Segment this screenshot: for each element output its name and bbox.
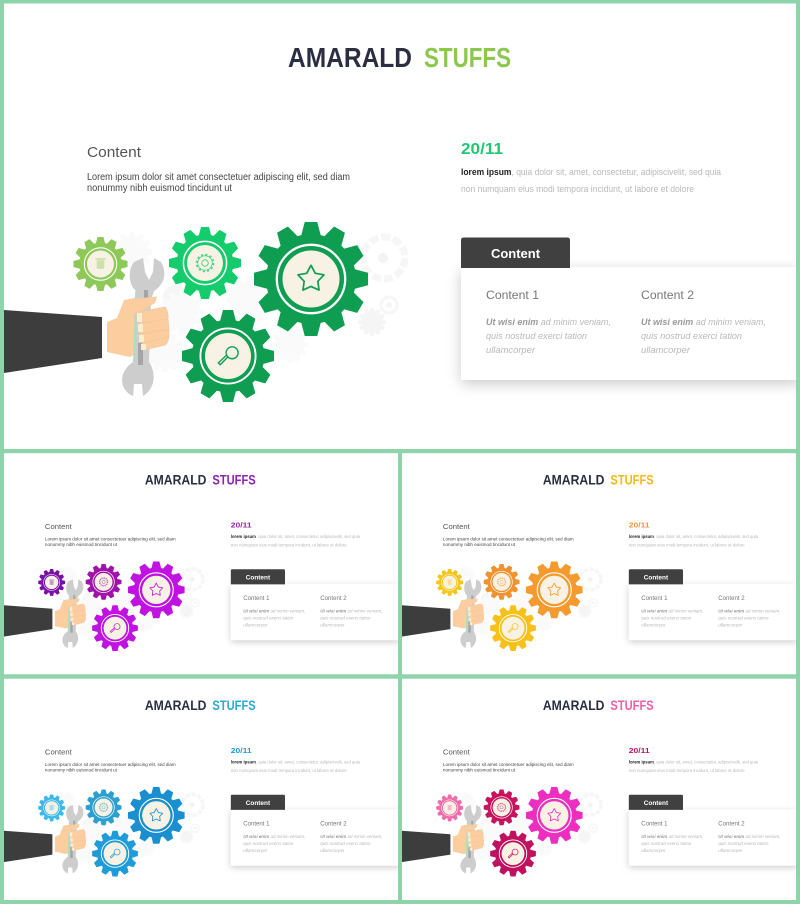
column 2 — [320, 821, 382, 854]
left text: Content — [45, 522, 73, 531]
tab: Content — [491, 246, 541, 261]
gear: magnifier icon — [490, 831, 536, 876]
card — [461, 267, 800, 380]
date: 20/11 — [461, 141, 503, 158]
gear: trash icon — [38, 569, 65, 596]
hand holding wrench — [4, 258, 169, 396]
background gears — [455, 792, 601, 862]
gear: cog icon — [484, 564, 519, 600]
title — [543, 472, 654, 487]
column 2 — [320, 596, 382, 629]
hand holding wrench — [402, 805, 484, 874]
title: AMARALD — [543, 698, 605, 713]
left paragraph: Lorem ipsum dolor sit amet consectetuer adipiscing elit, sed diam — [87, 172, 350, 183]
column 2: ullamcorper — [718, 848, 743, 854]
column 1: ullamcorper — [641, 623, 666, 629]
gear: magnifier icon — [92, 831, 138, 876]
right paragraph — [629, 760, 758, 774]
column 2: Ut wisi enim ad minim veniam, — [718, 834, 780, 840]
column 1: Ut wisi enim ad minim veniam, — [486, 317, 611, 328]
card — [629, 809, 798, 866]
left text: Lorem ipsum dolor sit amet consectetuer adipiscing elit, sed diam — [45, 537, 176, 543]
left text: nonummy nibh euismod tincidunt ut — [443, 542, 516, 548]
card — [231, 584, 400, 640]
title — [145, 698, 256, 713]
title: STUFFS — [610, 472, 654, 487]
background gears — [112, 232, 405, 372]
column 1: ullamcorper — [243, 623, 268, 629]
column 1: quis nostrud exerci tation — [641, 841, 692, 847]
column 1: Content 1 — [641, 596, 668, 602]
date: 20/11 — [231, 521, 252, 530]
gear: cog icon — [86, 790, 121, 825]
left text — [443, 748, 574, 774]
left text: nonummy nibh euismod tincidunt ut — [443, 768, 516, 774]
column 2: quis nostrud exerci tation — [641, 331, 742, 342]
column 2: quis nostrud exerci tation — [320, 841, 371, 847]
background gears — [455, 567, 601, 636]
tab: Content — [246, 574, 271, 581]
right paragraph: non numquam eius modi tempora incidunt, ut labore et dolore — [629, 543, 745, 549]
tab: Content — [246, 800, 271, 807]
column 1: Ut wisi enim ad minim veniam, — [243, 834, 305, 840]
left text: Content — [443, 748, 471, 757]
gear: star icon — [128, 562, 185, 618]
title: AMARALD — [288, 42, 412, 73]
column 2: Ut wisi enim ad minim veniam, — [718, 609, 780, 615]
left text: nonummy nibh euismod tincidunt ut — [45, 542, 118, 548]
gear: cog icon — [86, 564, 121, 600]
column 1 — [243, 821, 305, 854]
column 2: Content 2 — [718, 596, 745, 602]
right paragraph: lorem ipsum, quia dolor sit, amet, consectetur, adipiscivelit, sed quia — [231, 534, 360, 540]
column 1: ullamcorper — [243, 848, 268, 854]
gear: cog icon — [484, 790, 519, 825]
tab — [461, 238, 570, 268]
column 1: Ut wisi enim ad minim veniam, — [641, 609, 703, 615]
column 2: Content 2 — [718, 821, 745, 827]
date: 20/11 — [231, 746, 252, 755]
gear: trash icon — [436, 569, 463, 596]
column 2: ullamcorper — [641, 345, 691, 356]
right paragraph — [461, 167, 722, 195]
title — [543, 698, 654, 713]
column 2: quis nostrud exerci tation — [718, 616, 769, 622]
tab: Content — [644, 574, 669, 581]
column 2: ullamcorper — [718, 623, 743, 629]
right paragraph — [231, 534, 360, 549]
left heading: Content — [87, 144, 142, 161]
column 2: Ut wisi enim ad minim veniam, — [320, 609, 382, 615]
title: STUFFS — [424, 42, 511, 73]
left text: nonummy nibh euismod tincidunt ut — [45, 768, 118, 774]
column 2: ullamcorper — [320, 623, 345, 629]
card — [231, 809, 400, 866]
column 1: quis nostrud exerci tation — [641, 616, 692, 622]
tab — [231, 569, 285, 584]
column 1 — [641, 596, 703, 629]
left text: Lorem ipsum dolor sit amet consectetuer adipiscing elit, sed diam — [443, 762, 574, 768]
slide: green main — [4, 42, 800, 402]
left text: Lorem ipsum dolor sit amet consectetuer adipiscing elit, sed diam — [45, 762, 176, 768]
column 1: quis nostrud exerci tation — [486, 331, 587, 342]
right paragraph: lorem ipsum, quia dolor sit, amet, consectetur, adipiscivelit, sed quia — [461, 167, 722, 178]
column 2: Content 2 — [320, 596, 347, 602]
slide: pink — [402, 698, 798, 876]
column 1 — [641, 821, 703, 854]
column 2: ullamcorper — [320, 848, 345, 854]
hand holding wrench — [4, 579, 86, 648]
background gears — [57, 792, 203, 862]
column 1: quis nostrud exerci tation — [243, 616, 294, 622]
column 2 — [641, 288, 766, 356]
background gears — [57, 567, 203, 636]
column 1: Ut wisi enim ad minim veniam, — [641, 834, 703, 840]
column 2: Content 2 — [641, 288, 694, 302]
title: AMARALD — [145, 698, 207, 713]
title — [288, 42, 511, 73]
tab — [629, 569, 683, 584]
title: STUFFS — [212, 472, 256, 487]
slide: blue — [4, 698, 400, 876]
left text — [45, 522, 176, 548]
column 1: ullamcorper — [641, 848, 666, 854]
gear: magnifier icon — [92, 605, 138, 651]
column 1: ullamcorper — [486, 345, 536, 356]
title: STUFFS — [212, 698, 256, 713]
gear: trash icon — [38, 794, 65, 821]
column 1 — [243, 596, 305, 629]
column 1: Content 1 — [486, 288, 539, 302]
gear: magnifier icon — [182, 310, 274, 402]
gear: star icon — [254, 222, 368, 336]
column 2 — [718, 821, 780, 854]
column 1: Ut wisi enim ad minim veniam, — [243, 609, 305, 615]
column 2: Ut wisi enim ad minim veniam, — [641, 317, 766, 328]
column 2 — [718, 596, 780, 629]
column 2: quis nostrud exerci tation — [718, 841, 769, 847]
right paragraph: non numquam eius modi tempora incidunt, ut labore et dolore — [461, 184, 694, 195]
column 1: quis nostrud exerci tation — [243, 841, 294, 847]
tab — [629, 795, 683, 810]
left text — [443, 522, 574, 548]
title: STUFFS — [610, 698, 654, 713]
card — [629, 584, 798, 640]
left text — [45, 748, 176, 774]
left text: Content — [443, 522, 471, 531]
column 1: Content 1 — [243, 821, 270, 827]
left paragraph: nonummy nibh euismod tincidunt ut — [87, 183, 232, 194]
right paragraph — [629, 534, 758, 549]
date: 20/11 — [629, 521, 650, 530]
slide: purple — [4, 472, 400, 651]
left text: Lorem ipsum dolor sit amet consectetuer adipiscing elit, sed diam — [443, 537, 574, 543]
hand holding wrench — [402, 579, 484, 648]
title: AMARALD — [145, 472, 207, 487]
gear: trash icon — [74, 237, 128, 291]
right paragraph — [231, 760, 360, 774]
hand holding wrench — [4, 805, 86, 874]
right paragraph: non numquam eius modi tempora incidunt, ut labore et dolore — [231, 768, 347, 774]
gear: cog icon — [169, 227, 241, 299]
right paragraph: non numquam eius modi tempora incidunt, ut labore et dolore — [231, 543, 347, 549]
date: 20/11 — [629, 746, 650, 755]
column 2: Content 2 — [320, 821, 347, 827]
gear: star icon — [526, 787, 583, 844]
right paragraph: lorem ipsum, quia dolor sit, amet, consectetur, adipiscivelit, sed quia — [629, 534, 758, 540]
slide: yellow — [402, 472, 798, 651]
gear: star icon — [526, 562, 583, 618]
column 1 — [486, 288, 611, 356]
right paragraph: lorem ipsum, quia dolor sit, amet, consectetur, adipiscivelit, sed quia — [629, 760, 758, 766]
title: AMARALD — [543, 472, 605, 487]
column 2: quis nostrud exerci tation — [320, 616, 371, 622]
gear: star icon — [128, 787, 185, 844]
tab — [231, 795, 285, 810]
left text: Content — [45, 748, 73, 757]
column 1: Content 1 — [641, 821, 668, 827]
column 2: Ut wisi enim ad minim veniam, — [320, 834, 382, 840]
right paragraph: lorem ipsum, quia dolor sit, amet, consectetur, adipiscivelit, sed quia — [231, 760, 360, 766]
left paragraph — [87, 172, 350, 194]
gear: magnifier icon — [490, 605, 536, 651]
title — [145, 472, 256, 487]
right paragraph: non numquam eius modi tempora incidunt, ut labore et dolore — [629, 768, 745, 774]
gear: trash icon — [436, 794, 463, 821]
tab: Content — [644, 800, 669, 807]
column 1: Content 1 — [243, 596, 270, 602]
